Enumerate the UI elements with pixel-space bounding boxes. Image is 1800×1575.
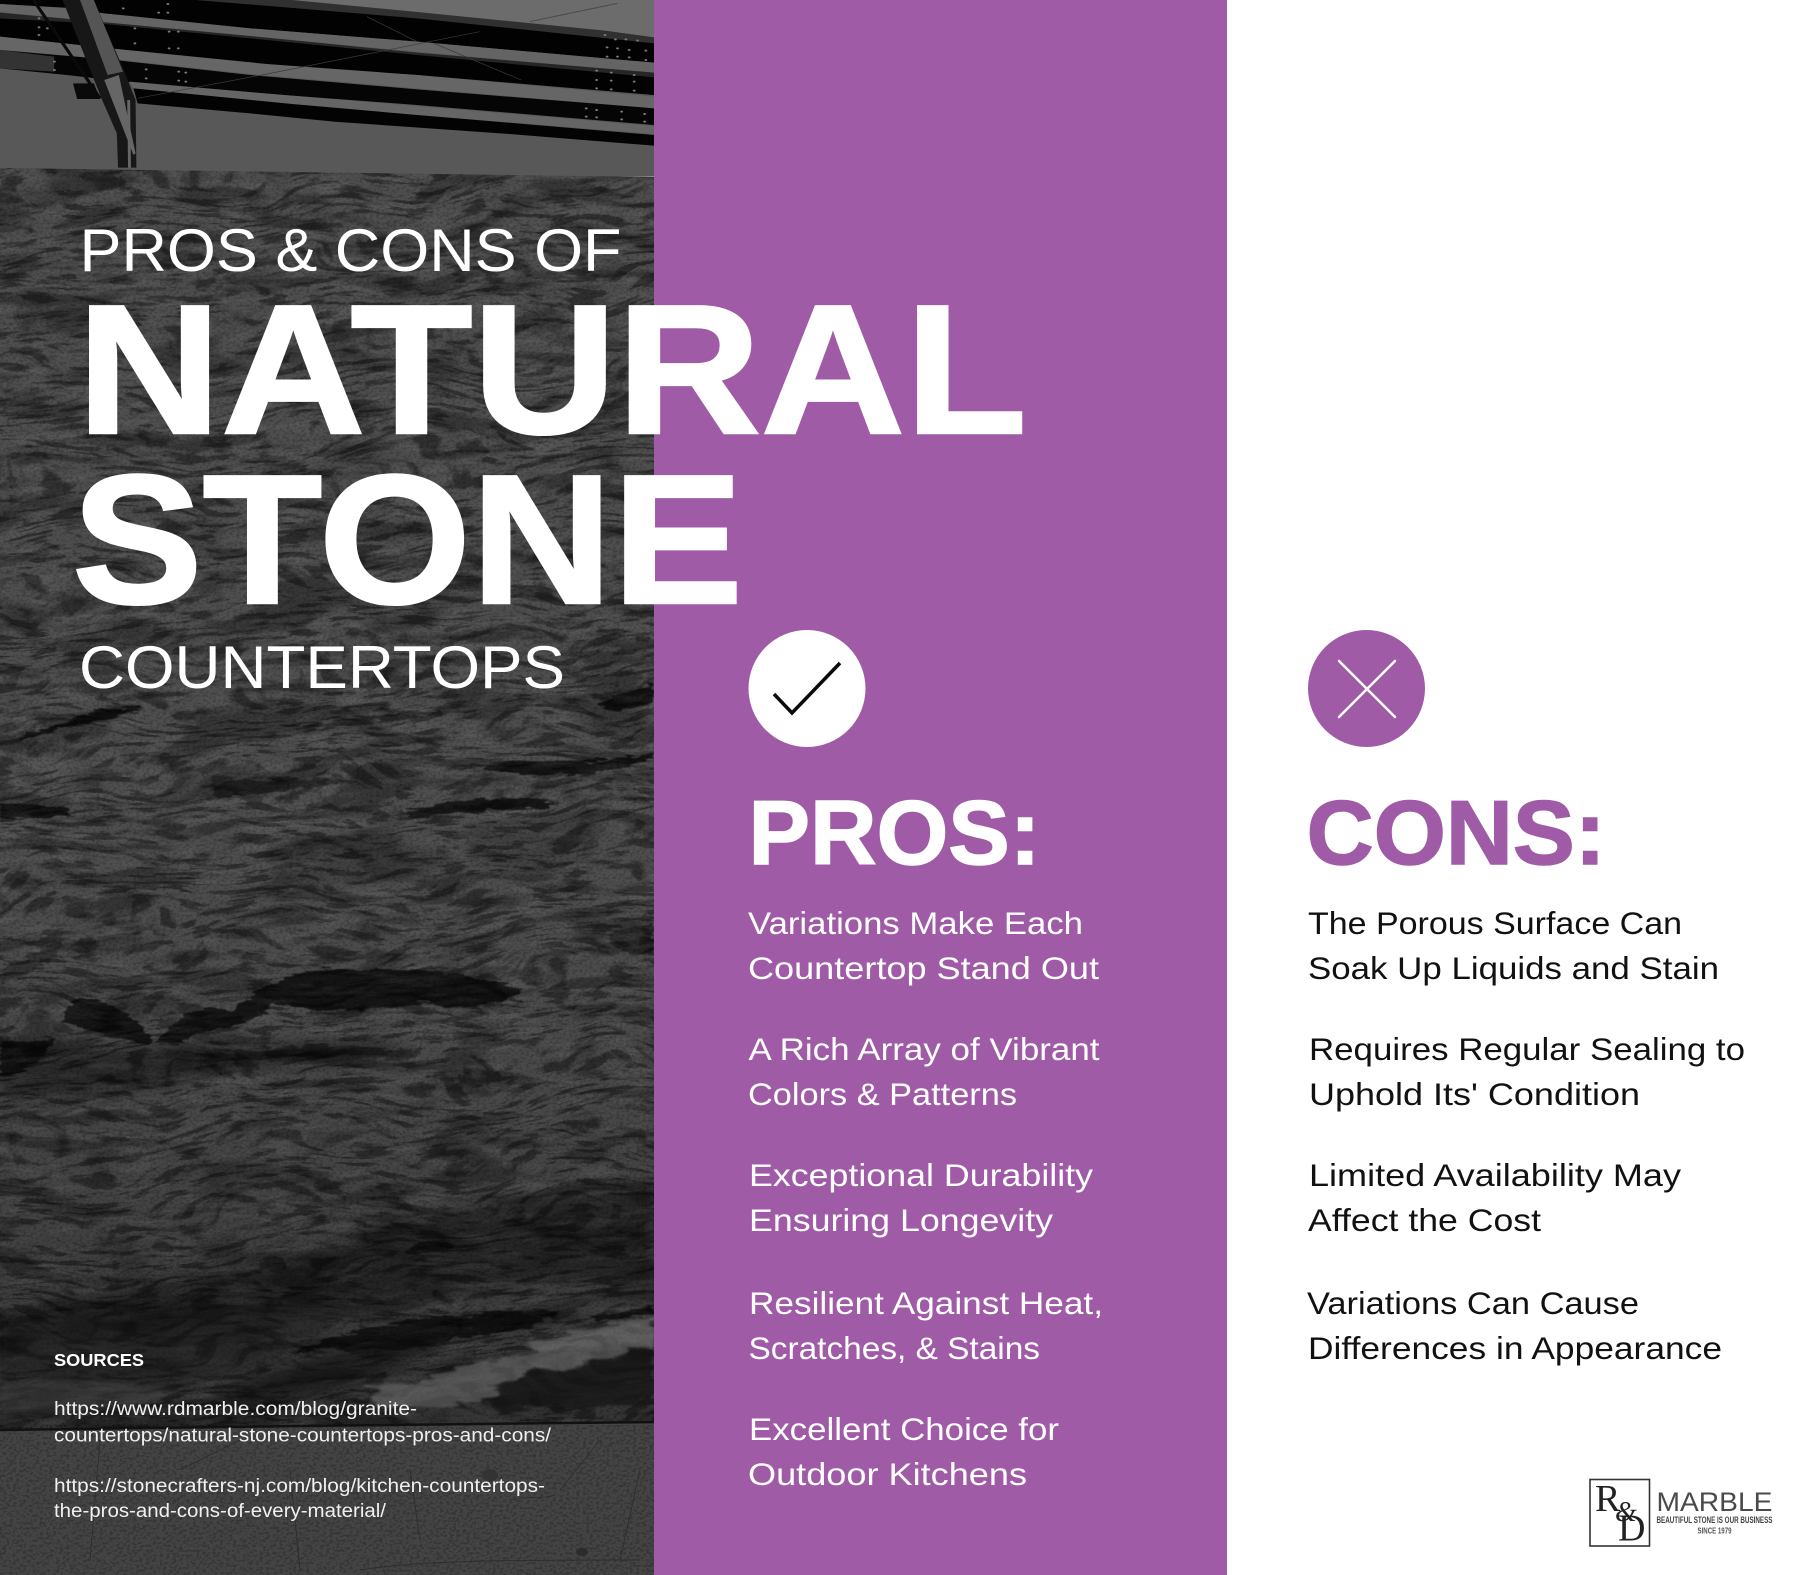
title line: natural: NATURAL <box>77 266 1027 472</box>
pro item 4: Scratches, & Stains <box>748 1330 1040 1366</box>
title line: countertops: COUNTERTOPS <box>79 634 565 701</box>
pro item 1: Variations Make Each <box>748 905 1083 941</box>
text block: sources <box>54 1350 552 1522</box>
logo since date: SINCE 1979 <box>1698 1526 1732 1536</box>
pro item 5: Outdoor Kitchens <box>748 1456 1027 1492</box>
panel: purple pros column <box>654 0 1227 1575</box>
heading: cons: CONS: <box>1307 783 1606 884</box>
source link 2 <box>54 1476 545 1522</box>
pro item 4 <box>748 1285 1103 1366</box>
logo wordmark: MARBLE <box>1656 1487 1772 1517</box>
sources heading: SOURCES <box>54 1350 144 1370</box>
list: pros <box>748 905 1103 1492</box>
icon: cross in purple circle <box>1308 630 1425 747</box>
con item 2 <box>1309 1031 1745 1112</box>
logo: R&D Marble <box>1590 1478 1772 1550</box>
source link 1: countertops/natural-stone-countertops-pros-and-cons/ <box>54 1426 552 1446</box>
pro item 1: Countertop Stand Out <box>748 950 1099 986</box>
photo: stone slab texture <box>0 168 654 1429</box>
con item 4: Variations Can Cause <box>1307 1285 1639 1321</box>
list: cons <box>1307 905 1745 1366</box>
con item 3: Affect the Cost <box>1308 1202 1541 1238</box>
logo monogram: R <box>1595 1478 1621 1520</box>
pro item 5: Excellent Choice for <box>749 1411 1059 1447</box>
pro item 3 <box>749 1157 1093 1238</box>
photo: lower floor area <box>0 1422 654 1575</box>
con item 1 <box>1308 905 1719 986</box>
heading: pros: PROS: <box>748 783 1040 884</box>
con item 4 <box>1307 1285 1722 1366</box>
con item 3 <box>1308 1157 1681 1238</box>
panel: stone slab photo <box>0 0 785 1575</box>
pro item 2 <box>748 1031 1100 1112</box>
con item 2: Uphold Its' Condition <box>1309 1076 1640 1112</box>
photo: warehouse ceiling beams <box>0 0 654 177</box>
logo monogram <box>1590 1478 1650 1550</box>
pro item 3: Ensuring Longevity <box>749 1202 1053 1238</box>
source link 2: the-pros-and-cons-of-every-material/ <box>54 1501 387 1522</box>
source link 1 <box>54 1399 552 1446</box>
icon: check mark in white circle <box>748 630 866 747</box>
title <box>72 217 1027 701</box>
con item 4: Differences in Appearance <box>1308 1330 1722 1366</box>
con item 3: Limited Availability May <box>1309 1157 1681 1193</box>
con item 2: Requires Regular Sealing to <box>1309 1031 1745 1067</box>
pro item 2: Colors & Patterns <box>748 1076 1017 1112</box>
source link 1: https://www.rdmarble.com/blog/granite- <box>54 1399 417 1420</box>
title line: pros and cons of: PROS & CONS OF <box>80 217 622 284</box>
title line: stone: STONE <box>72 436 743 642</box>
con item 1: The Porous Surface Can <box>1308 905 1682 941</box>
logo monogram: & <box>1615 1497 1637 1528</box>
pro item 5 <box>748 1411 1059 1492</box>
pro item 2: A Rich Array of Vibrant <box>748 1031 1100 1067</box>
con item 1: Soak Up Liquids and Stain <box>1308 950 1719 986</box>
pro item 1 <box>748 905 1099 986</box>
logo monogram: D <box>1618 1508 1645 1550</box>
source link 2: https://stonecrafters-nj.com/blog/kitchen-countertops- <box>54 1476 545 1497</box>
pro item 3: Exceptional Durability <box>749 1157 1093 1193</box>
photo: bright streak across slab <box>0 1304 654 1420</box>
pro item 4: Resilient Against Heat, <box>749 1285 1103 1321</box>
